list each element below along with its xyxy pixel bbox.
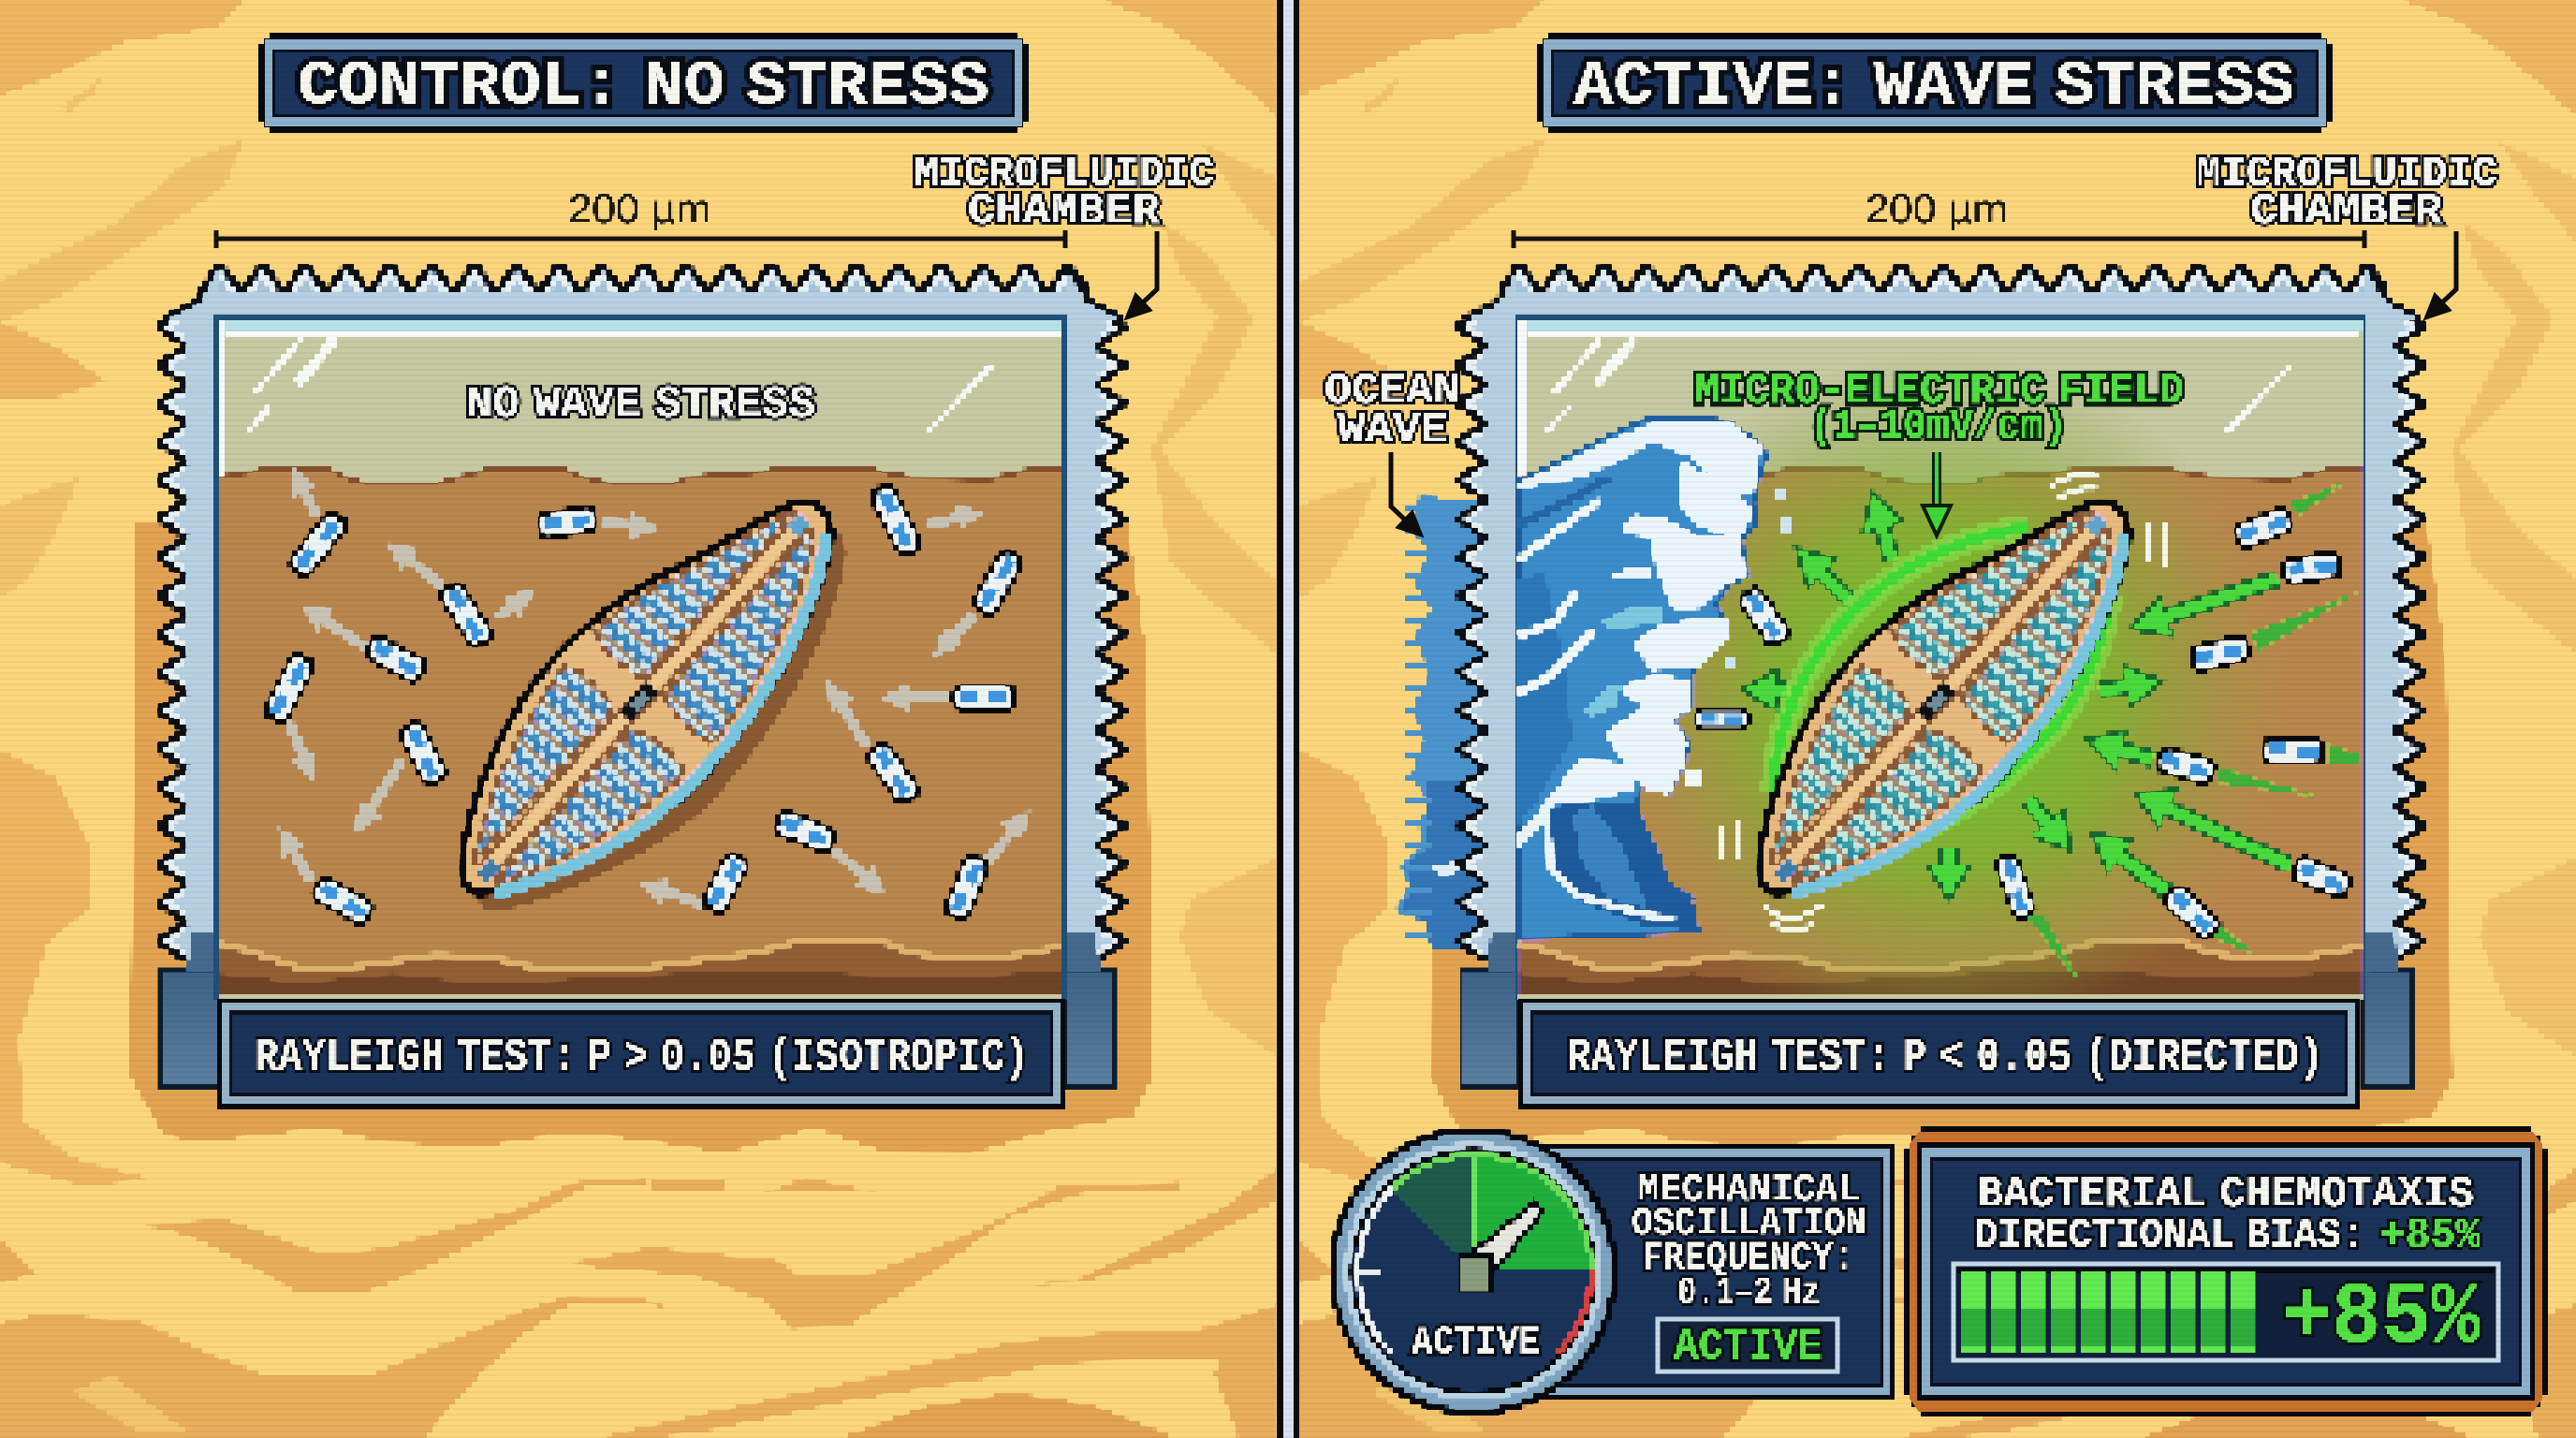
heading plate: active: ACTIVE: WAVE STRESS [1573,51,2294,122]
arrow: to chamber [1140,231,1157,305]
diatom cell, glowing [1699,444,2187,955]
electric field arcs [1773,527,2110,861]
heading: chemotaxis directional bias: BACTERIAL CHEMOTAXIS [1978,1170,2474,1219]
result plate: rayleigh test isotropic [217,999,1065,1109]
text: oscillation frequency: FREQUENCY: [1642,1236,1854,1281]
electric field glow [1619,356,2360,994]
bacteria, isotropic [258,478,1028,930]
label: micro-electric field: MICRO-ELECTRIC FIELD [1694,367,2184,416]
heading plate: control: CONTROL: NO STRESS [298,51,989,122]
microfluidic chamber frame [155,262,1127,1086]
progress bar: 85 percent [1954,1264,2498,1369]
label: ocean wave: OCEAN [1325,367,1460,416]
gauge face [1329,1127,1617,1416]
outward and inward green arrows [1774,481,2361,985]
text: oscillation frequency: MECHANICAL [1637,1167,1860,1212]
outer wave behind chamber [1395,496,1535,950]
label: micro-electric field: (1–10mV/cm) [1809,403,2067,451]
status badge: active: ACTIVE [1674,1323,1822,1372]
divider between panels [1277,0,1299,1438]
heading: chemotaxis directional bias [1974,1170,2481,1260]
result plate: rayleigh test directed [1518,999,2360,1109]
heading: chemotaxis directional bias: DIRECTIONAL BIAS: [1974,1211,2364,1260]
ocean wave [1516,418,1792,939]
label: no wave stress: NO WAVE STRESS [466,380,815,431]
heading plate: active [1537,33,2333,133]
panel: mechanical oscillation [1535,1144,1895,1400]
heading plate: control [258,33,1029,133]
text: oscillation frequency [1632,1167,1866,1315]
scale bar: 200 µm: 200 µm [1866,186,2008,232]
scale bar: 200 µm: 200 µm [568,186,711,232]
microfluidic chamber frame [1455,262,2426,1086]
panel: bacterial chemotaxis [1904,1126,2548,1416]
panel: active, wave stress [1325,33,2548,1416]
label: microfluidic chamber [914,150,1214,236]
label: microfluidic chamber: CHAMBER [968,187,1160,236]
random bacteria motility arrows [288,487,1016,904]
scale bar: 200 µm [216,186,1065,248]
panel: control, no stress [155,33,1214,1109]
chamber scene: control [155,262,1127,1086]
label: ocean wave [1325,367,1460,455]
arrow: to ocean wave [1391,452,1408,522]
diatom cell [402,444,904,974]
arrow: field to diatom [1923,452,1951,536]
label: ocean wave: WAVE [1338,406,1448,455]
label: microfluidic chamber: MICROFLUIDIC [914,150,1214,198]
label: microfluidic chamber: MICROFLUIDIC [2196,150,2497,198]
label: microfluidic chamber: CHAMBER [2250,187,2442,236]
text: oscillation frequency: 0.1–2 Hz [1677,1270,1821,1315]
value: +85%: +85% [2282,1269,2481,1369]
vibration marks [1720,476,2164,931]
text: oscillation frequency: OSCILLATION [1632,1201,1866,1246]
arrow: to chamber [2439,231,2456,305]
chamber scene: active [1395,262,2426,1086]
result plate: rayleigh test directed: RAYLEIGH TEST: P < 0.05 (DIRECTED) [1567,1032,2323,1085]
gauge: oscillation dial [1329,1127,1617,1416]
gauge label: ACTIVE [1412,1320,1540,1365]
label: micro-electric field [1694,367,2184,451]
heading: chemotaxis directional bias: +85% [2380,1211,2481,1260]
label: microfluidic chamber [2196,150,2497,236]
result plate: rayleigh test isotropic: RAYLEIGH TEST: P > 0.05 (ISOTROPIC) [255,1032,1029,1085]
scale bar: 200 µm [1514,186,2364,248]
bacteria, directed [1692,503,2356,946]
